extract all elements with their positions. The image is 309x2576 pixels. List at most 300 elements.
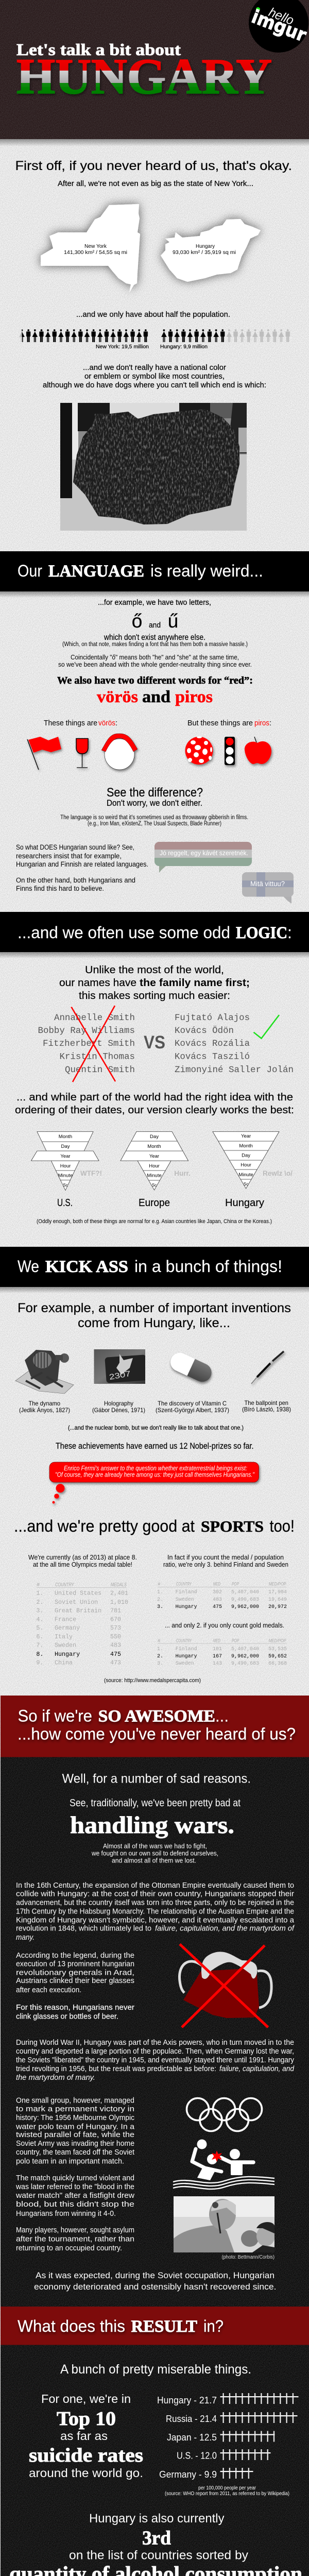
text: wars lost: and almost all of them we lost. bbox=[112, 1857, 196, 1865]
paragraph: 16th century: failure, capitulation, and the martyrdom of bbox=[155, 1924, 295, 1933]
text: see the difference: Don't worry, we don't either. bbox=[107, 798, 202, 808]
table: all time medals: 3. bbox=[36, 1607, 43, 1615]
section bar: language bbox=[0, 551, 309, 598]
name list: family name first: Kovács Rozália bbox=[175, 1039, 250, 1049]
table: medal per population: 1. bbox=[157, 1590, 163, 1596]
invention: ballpoint pen bbox=[242, 1351, 291, 1413]
icon: red-haired head bbox=[101, 734, 138, 770]
text: what Hungarian sounds like bbox=[16, 843, 148, 892]
text: suicide rates top 10: suicide rates bbox=[29, 2445, 143, 2466]
table: medal per population: 2. bbox=[157, 1597, 163, 1603]
text: suicide rates top 10: as far as bbox=[60, 2429, 108, 2443]
table: medal per population: 475 bbox=[213, 1604, 222, 1610]
invention: dynamo: The dynamo bbox=[29, 1400, 60, 1407]
paragraph: beer legend: For this reason, Hungarians never bbox=[16, 2003, 134, 2012]
paragraph: beer legend: Austrians clinked their beer glasses bbox=[16, 1976, 134, 1985]
table: gold medals per population: 66,368 bbox=[268, 1661, 287, 1667]
invention: dynamo bbox=[15, 1350, 74, 1414]
table: gold medals per population: # bbox=[158, 1638, 161, 1643]
table: all time medals: 550 bbox=[110, 1633, 121, 1640]
name list: family name first: Zimonyiné Saller Jolán bbox=[175, 1065, 294, 1075]
name list: first name first bbox=[38, 1006, 135, 1082]
name list: family name first bbox=[175, 1013, 294, 1075]
table: medal per population: Finland bbox=[176, 1589, 197, 1596]
chart: suicide rates crosses: Russia - 21.4 bbox=[166, 2414, 217, 2424]
label: vörös things: : bbox=[115, 719, 117, 727]
heading: alcohol consumption: on the list of countries sorted by bbox=[69, 2548, 248, 2563]
table: gold medals per population bbox=[157, 1638, 287, 1667]
text: two letters: ...for example, we have two letters, bbox=[98, 598, 211, 607]
speech bubble: Hungarian bbox=[154, 842, 252, 873]
section band: so awesome: SO AWESOME bbox=[98, 1707, 215, 1725]
section band: result: RESULT bbox=[131, 2317, 197, 2336]
heading: vörös and piros: and bbox=[142, 688, 170, 706]
note: Asian countries: (Oddly enough, both of these things are normal for e.g. Asian countries like Japan, China or the Koreas.) bbox=[37, 1218, 272, 1225]
diagram: Europe date order: Europe bbox=[139, 1197, 170, 1209]
section band: result bbox=[1, 2307, 309, 2345]
table: gold medals per population: 5,407,040 bbox=[231, 1647, 259, 1652]
map: New York: 141,300 km² / 54,55 sq mi bbox=[64, 249, 127, 256]
table: gold medals per population: 9,490,683 bbox=[231, 1661, 259, 1667]
text: economy: economy deteriorated and ostensibly hasn't recovered since. bbox=[34, 2282, 276, 2292]
table: medal per population bbox=[157, 1582, 287, 1610]
paragraph: water polo team: One small group, however, managed bbox=[16, 2096, 134, 2105]
text: suicide rates top 10: around the world go. bbox=[29, 2466, 143, 2480]
text: family name first: Unlike the most of the world, bbox=[85, 964, 224, 976]
photo: puli dog bbox=[60, 403, 247, 531]
text: see the difference: (e.g., Iron Man, eXistenZ, The Usual Suspects, Blade Runner) bbox=[88, 821, 221, 827]
table: all time medals: 475 bbox=[110, 1651, 121, 1658]
text: what Hungarian sounds like: So what DOES Hungarian sound like? See, bbox=[16, 843, 134, 851]
table: gold medals per population: COUNTRY bbox=[176, 1638, 192, 1643]
text: half the population: ...and we only have about half the population. bbox=[76, 310, 230, 319]
text: suicide rates top 10: For one, we're in bbox=[41, 2392, 131, 2405]
text: two letters: which don't exist anywhere else. bbox=[104, 633, 205, 642]
text: gold medals: ... and only 2. if you only count gold medals. bbox=[165, 1621, 284, 1629]
label: piros things: : bbox=[269, 719, 271, 727]
section bar: kick ass: in a bunch of things! bbox=[134, 1257, 282, 1276]
note: nuclear bomb: (...and the nuclear bomb, but we don't really like to talk about that one.) bbox=[68, 1424, 244, 1431]
text: sad reasons: Well, for a number of sad reasons. bbox=[62, 1772, 251, 1786]
speech bubble: Hungarian: Jó reggelt, egy kávét szeretnék. bbox=[160, 849, 248, 857]
paragraph: water polo team: returning to an occupied country. bbox=[16, 2244, 122, 2252]
pictogram: New York population: New York: 19,5 million bbox=[96, 344, 149, 350]
heading: sports: too! bbox=[270, 1517, 295, 1535]
chart: suicide rates crosses: Japan - 12.5 bbox=[167, 2432, 217, 2443]
diagram: Hungary date order: Sc bbox=[244, 1182, 248, 1187]
table: all time medals: 1,010 bbox=[110, 1599, 128, 1606]
icon: green check bbox=[253, 1015, 279, 1039]
text: place 8: We're currently (as of 2013) at place 8. bbox=[28, 1553, 137, 1561]
paragraph: world war II: tried revolting in 1956, but the result was predictable as before: bbox=[16, 2064, 216, 2073]
section bar: logic: ...and we often use some odd bbox=[18, 923, 230, 942]
section bar: language: LANGUAGE bbox=[48, 562, 144, 581]
badge: hello imgur: hello bbox=[267, 5, 296, 28]
table: all time medals: 5. bbox=[36, 1624, 43, 1632]
heading: alcohol consumption: 3rd bbox=[142, 2528, 171, 2549]
source: medals per capita: (source: http://www.medalspercapita.com) bbox=[104, 1677, 201, 1684]
heading: inventions: For example, a number of important inventions bbox=[18, 1301, 291, 1315]
table: medal per population: Hungary bbox=[176, 1604, 197, 1610]
table: gold medals per population: 59,652 bbox=[268, 1654, 287, 1659]
text: what Hungarian sounds like: researchers insist that for example, bbox=[16, 852, 122, 860]
photo: bleeding water polo player bbox=[174, 2196, 275, 2260]
table: medal per population: POP bbox=[232, 1582, 239, 1587]
heading: first off: First off, if you never heard of us, that's okay. bbox=[15, 159, 292, 173]
chart: suicide rates crosses: Germany - 9.9 bbox=[159, 2469, 217, 2480]
icon: traffic light bbox=[225, 737, 235, 765]
table: all time medals: Great Britain bbox=[55, 1607, 101, 1615]
name list: first name first: Annabelle Smith bbox=[54, 1013, 135, 1023]
section band: result: in? bbox=[203, 2317, 224, 2335]
heading: vörös and piros: piros bbox=[175, 688, 213, 706]
text: national color: although we do have dogs where you can't tell which end is which: bbox=[43, 381, 266, 389]
text: two letters: and bbox=[149, 621, 161, 630]
text: see the difference: The language is so weird that it's sometimes used as throwaway gibberish in films. bbox=[60, 815, 248, 821]
map: Hungary: 93,030 km² / 35,919 sq mi bbox=[173, 249, 236, 256]
speech bubble: Finnish: Mitä vittuu? bbox=[250, 880, 285, 888]
text: place 8 bbox=[28, 1553, 137, 1568]
table: medal per population: # bbox=[158, 1582, 161, 1587]
paragraph: water polo team: water match" after a fistfight drew bbox=[15, 2191, 134, 2200]
paragraph: water polo team: twisted parallel of fate, while the bbox=[16, 2130, 134, 2139]
name list: first name first: Fitzherbert Smith bbox=[43, 1039, 135, 1049]
paragraph: beer legend: According to the legend, during the bbox=[16, 1951, 134, 1960]
table: all time medals: Germany bbox=[55, 1624, 80, 1632]
heading: miserable things: A bunch of pretty miserable things. bbox=[60, 2362, 251, 2377]
paragraph: world war II: country and deported a large portion of the populace. Then, when Germany lost the war, bbox=[16, 2047, 294, 2056]
table: gold medals per population: 53,535 bbox=[268, 1647, 287, 1652]
heading: sports: ...and we're pretty good at bbox=[14, 1517, 195, 1535]
text: national color bbox=[43, 363, 266, 389]
table: medal per population: 302 bbox=[213, 1590, 222, 1596]
invention: holography: Holography bbox=[104, 1400, 133, 1407]
diagram: Europe date order: Minute bbox=[147, 1173, 162, 1179]
section bar: logic: LOGIC bbox=[236, 924, 287, 942]
heading: vörös and piros: vörös bbox=[97, 688, 138, 706]
paragraph: world war II bbox=[16, 2038, 295, 2082]
title intro: Let's talk a bit about bbox=[16, 40, 181, 59]
paragraph: water polo team: after the tournament, rather than bbox=[16, 2235, 134, 2244]
table: all time medals: COUNTRY bbox=[55, 1582, 74, 1588]
header panel bbox=[0, 0, 309, 146]
text: what Hungarian sounds like: Finns find this hard to believe. bbox=[16, 885, 104, 892]
text: see the difference bbox=[60, 786, 248, 827]
text: medal population ratio bbox=[163, 1553, 288, 1568]
paragraph: 16th century: In the 16th Century, the expansion of the Ottoman Empire eventually caused them to bbox=[16, 1881, 294, 1890]
table: gold medals per population: 2. bbox=[157, 1654, 163, 1659]
text: see the difference: See the difference? bbox=[107, 786, 203, 800]
text: family name first: our names have bbox=[59, 977, 136, 989]
section band: result: What does this bbox=[18, 2317, 125, 2335]
paragraph: world war II: the martyrdom of many. bbox=[16, 2073, 95, 2082]
text: medal population ratio: ratio, we're only 3. behind Finland and Sweden bbox=[163, 1561, 288, 1568]
heading: two words for red: We also have two different words for “red”: bbox=[57, 675, 253, 686]
invention: holography: (Gábor Dénes, 1971) bbox=[92, 1406, 145, 1414]
map: New York: New York bbox=[84, 243, 107, 249]
table: all time medals: Italy bbox=[55, 1633, 73, 1640]
label: vörös things: vörös bbox=[98, 719, 115, 727]
text: two letters bbox=[58, 598, 252, 668]
invention: ballpoint pen: The ballpoint pen bbox=[244, 1399, 288, 1406]
name list: first name first: Kristin Thomas bbox=[60, 1052, 135, 1062]
table: gold medals per population: 3. bbox=[157, 1661, 163, 1667]
table: all time medals: 9. bbox=[36, 1659, 43, 1667]
label: vörös things: These things are bbox=[44, 719, 97, 727]
name list: first name first: Quentin Smith bbox=[65, 1065, 135, 1075]
paragraph: water polo team: to mark a permanent victory in bbox=[16, 2105, 134, 2113]
subheading: state of New York: After all, we're not even as big as the state of New York... bbox=[58, 179, 253, 188]
paragraph: beer legend: clink glasses or bottles of beer. bbox=[16, 2012, 118, 2021]
text: two letters: ő bbox=[132, 611, 142, 632]
table: medal per population: 3. bbox=[157, 1604, 163, 1610]
heading: alcohol consumption bbox=[9, 2512, 305, 2576]
diagram: Hungary date order: Rewlz \o/ bbox=[263, 1170, 293, 1177]
table: all time medals: 6. bbox=[36, 1633, 43, 1640]
chart: suicide rates crosses: U.S. - 12.0 bbox=[177, 2450, 217, 2461]
table: all time medals: United States bbox=[55, 1590, 101, 1597]
text: family name first bbox=[59, 964, 250, 1002]
table: all time medals: 483 bbox=[110, 1642, 121, 1649]
diagram: Europe date order bbox=[121, 1131, 191, 1209]
section band: so awesome: ... bbox=[215, 1706, 229, 1725]
callout: Enrico Fermi thought bubble: Enrico Fermi's answer to the question whether extraterrestrial beings exist: bbox=[64, 1465, 247, 1472]
icon: water polo players bbox=[173, 2139, 274, 2189]
table: gold medals per population: Finland bbox=[176, 1646, 197, 1652]
name list: first name first: Bobby Ray Williams bbox=[38, 1026, 135, 1036]
photo: bleeding water polo player: (photo: Bettmann/Corbis) bbox=[221, 2255, 274, 2260]
text: ordering of dates bbox=[15, 1092, 294, 1116]
table: all time medals: Hungary bbox=[55, 1651, 80, 1658]
icon: olympic rings bbox=[186, 2098, 262, 2131]
table: all time medals: 573 bbox=[110, 1624, 121, 1632]
pictogram: New York population bbox=[19, 329, 149, 350]
heading: sports: SPORTS bbox=[201, 1517, 264, 1535]
icon: red X bbox=[71, 1006, 115, 1082]
table: medal per population: 19,649 bbox=[268, 1597, 287, 1603]
map: New York bbox=[41, 204, 140, 293]
diagram: U.S. date order: Day bbox=[61, 1144, 70, 1149]
table: all time medals: MEDALS bbox=[111, 1582, 127, 1588]
diagram: Hungary date order: Hungary bbox=[225, 1197, 264, 1209]
diagram: Hungary date order: Day bbox=[242, 1153, 250, 1159]
section bar: logic bbox=[0, 912, 309, 958]
diagram: U.S. date order: Hour bbox=[60, 1163, 71, 1169]
diagram: Europe date order: Hurr. bbox=[174, 1170, 191, 1177]
table: all time medals: 8. bbox=[36, 1651, 43, 1658]
text: ordering of dates: ... and while part of the world had the right idea with the bbox=[16, 1092, 293, 1103]
table: all time medals: # bbox=[37, 1582, 40, 1588]
paragraph: 16th century bbox=[16, 1881, 295, 1942]
diagram: U.S. date order: Year bbox=[60, 1154, 71, 1159]
paragraph: water polo team: was later referred to the "blood in the bbox=[15, 2182, 134, 2191]
section band: so awesome: ...how come you've never heard of us? bbox=[18, 1725, 296, 1743]
text: national color: or emblem or symbol like most countries, bbox=[84, 372, 225, 381]
invention: vitamin C pill bbox=[156, 1350, 229, 1414]
text: economy bbox=[34, 2270, 276, 2292]
paragraph: beer legend: after each execution. bbox=[16, 1986, 81, 1994]
section bar: language: is really weird... bbox=[150, 562, 263, 580]
paragraph: water polo team: Soviet Army was invading their home bbox=[16, 2139, 134, 2148]
text: two letters: (Which, on that note, makes finding a font that has them both a massive hassle.) bbox=[62, 641, 248, 648]
table: gold medals per population: Sweden bbox=[176, 1660, 194, 1667]
invention: ballpoint pen: (Bíró László, 1938) bbox=[242, 1405, 291, 1413]
pictogram: Hungary population bbox=[160, 329, 291, 350]
table: medal per population: Sweden bbox=[176, 1597, 194, 1603]
table: all time medals: Soviet Union bbox=[55, 1599, 98, 1606]
table: all time medals: France bbox=[55, 1616, 76, 1623]
table: gold medals per population: 9,962,000 bbox=[231, 1654, 259, 1659]
text: family name first: this makes sorting much easier: bbox=[79, 990, 230, 1002]
table: gold medals per population: Hungary bbox=[176, 1654, 197, 1659]
table: medal per population: 483 bbox=[213, 1597, 222, 1603]
table: all time medals: 2. bbox=[36, 1599, 43, 1606]
paragraph: water polo team: history: The 1956 Melbourne Olympic bbox=[16, 2113, 134, 2122]
title: HUNGARY: HUNGARY bbox=[16, 49, 272, 104]
paragraph: beer legend bbox=[16, 1951, 134, 2021]
diagram: Hungary date order bbox=[213, 1131, 293, 1209]
diagram: Europe date order: Day bbox=[150, 1134, 159, 1140]
diagram: Hungary date order: Minute bbox=[238, 1172, 253, 1178]
text: wars lost bbox=[91, 1842, 218, 1865]
name list: family name first: Fujtató Alajos bbox=[175, 1013, 250, 1023]
table: all time medals: 1. bbox=[36, 1590, 43, 1597]
label: piros things: But these things are bbox=[187, 719, 253, 727]
name list: family name first: Kovács Ödön bbox=[175, 1026, 234, 1036]
dark middle section background bbox=[1, 1757, 309, 2576]
section bar: language: Our bbox=[18, 562, 42, 580]
chart: suicide rates crosses bbox=[157, 2393, 299, 2497]
icon: red apple bbox=[245, 737, 271, 764]
text: two letters: so we've been ahead with the whole gender-neutrality thing since ever. bbox=[58, 660, 252, 668]
diagram: U.S. date order bbox=[31, 1131, 102, 1209]
chart: suicide rates crosses: Hungary - 21.7 bbox=[157, 2395, 217, 2405]
text: what Hungarian sounds like: On the other hand, both Hungarians and bbox=[16, 876, 135, 884]
heading: handling wars: handling wars. bbox=[70, 1812, 234, 1839]
paragraph: 16th century: many. bbox=[16, 1933, 35, 1942]
paragraph: water polo team: The match quickly turned violent and bbox=[16, 2174, 134, 2182]
table: medal per population: MED/POP bbox=[269, 1582, 286, 1587]
diagram: Hungary date order: Month bbox=[239, 1143, 253, 1149]
diagram: Europe date order: Year bbox=[149, 1154, 159, 1159]
text: wars lost: we fought on our own soil to defend ourselves, bbox=[91, 1850, 218, 1857]
diagram: Europe date order: Hour bbox=[149, 1163, 160, 1169]
table: all time medals: 4. bbox=[36, 1616, 43, 1623]
table: all time medals: 473 bbox=[110, 1659, 121, 1667]
diagram: U.S. date order: Month bbox=[59, 1134, 72, 1140]
paragraph: world war II: failure, capitulation, and bbox=[219, 2064, 295, 2073]
paragraph: water polo team: Hungarians from winning it 4-0. bbox=[16, 2209, 116, 2218]
invention: holography: 2307 bbox=[109, 1369, 131, 1382]
table: all time medals bbox=[36, 1582, 128, 1667]
invention: vitamin C pill: The discovery of Vitamin C bbox=[158, 1400, 227, 1407]
table: all time medals: Sweden bbox=[55, 1642, 76, 1649]
diagram: Hungary date order: Hour bbox=[241, 1162, 251, 1168]
paragraph: water polo team: Many players, however, sought asylum bbox=[16, 2226, 134, 2234]
chart: suicide rates crosses: per 100,000 people per year bbox=[198, 2485, 256, 2491]
table: medal per population: 9,490,683 bbox=[231, 1597, 259, 1603]
dark header background bbox=[0, 0, 309, 139]
section band: so awesome: So if we're bbox=[18, 1706, 92, 1725]
icon: red flag bbox=[27, 737, 61, 770]
callout: Enrico Fermi thought bubble: "Of course, they are already here among us: they just call themselves Hungarians." bbox=[55, 1471, 254, 1479]
paragraph: 16th century: revolution in 1848, which ultimately led to bbox=[16, 1924, 151, 1933]
text: two letters: ű bbox=[168, 611, 178, 632]
text: two letters: Coincidentally "ő" means both "he" and "she" at the same time, bbox=[71, 653, 239, 661]
diagram: Europe date order: Sc bbox=[152, 1183, 157, 1188]
heading: sports bbox=[14, 1517, 295, 1535]
text: Nobel prizes: These achievements have earned us 12 Nobel-prizes so far. bbox=[56, 1441, 253, 1451]
text: national color: ...and we don't really have a national color bbox=[83, 363, 226, 372]
name list: family name first: Kovács Tasziló bbox=[175, 1052, 250, 1062]
table: all time medals: 781 bbox=[110, 1607, 121, 1615]
paragraph: water polo team: country, the team faced off the Soviet bbox=[16, 2148, 135, 2157]
icon: wine glass bbox=[76, 739, 88, 768]
paragraph: 16th century: Kingdom of Hungary wasn't symbiotic, however, and it eventually escalated into a bbox=[16, 1916, 295, 1925]
section bar: kick ass bbox=[0, 1247, 309, 1293]
callout: Enrico Fermi thought bubble bbox=[49, 1462, 259, 1503]
table: gold medals per population: 143 bbox=[213, 1661, 222, 1667]
text: medal population ratio: In fact if you count the medal / population bbox=[167, 1553, 284, 1561]
text: economy: As it was expected, during the Soviet occupation, Hungarian bbox=[36, 2270, 274, 2280]
invention: holography bbox=[92, 1349, 148, 1414]
table: medal per population: 17,904 bbox=[268, 1590, 287, 1596]
text: place 8: at the all time Olympics medal table! bbox=[33, 1561, 132, 1568]
heading: inventions bbox=[18, 1301, 291, 1330]
pictogram: Hungary population: Hungary: 9,9 million bbox=[160, 344, 208, 350]
table: gold medals per population: 101 bbox=[213, 1647, 222, 1652]
paragraph: 16th century: advancement, but the country itself was torn into three parts, only to be rejoined in the bbox=[16, 1898, 294, 1907]
diagram: Europe date order: Month bbox=[147, 1144, 161, 1149]
label: VS: VS bbox=[144, 1032, 165, 1053]
paragraph: water polo team: water polo team of Hungary. In a bbox=[15, 2122, 135, 2131]
section band: so awesome bbox=[1, 1696, 309, 1757]
diagram: Hungary date order: Year bbox=[241, 1133, 251, 1139]
table: gold medals per population: MED/POP bbox=[269, 1638, 286, 1643]
table: all time medals: 7. bbox=[36, 1642, 43, 1649]
table: gold medals per population: MED bbox=[213, 1638, 220, 1643]
heading: inventions: come from Hungary, like... bbox=[78, 1316, 230, 1330]
section bar: kick ass: KICK ASS bbox=[45, 1258, 128, 1276]
table: medal per population: 20,972 bbox=[268, 1604, 287, 1610]
paragraph: 16th century: collide with Hungary: at the cost of their own country, Hungarians stopped their bbox=[16, 1890, 294, 1899]
paragraph: water polo team: blood, but this didn't stop the bbox=[16, 2200, 134, 2209]
heading: vörös and piros bbox=[97, 688, 213, 706]
icon: polka dot ball bbox=[185, 736, 213, 765]
table: all time medals: 670 bbox=[110, 1616, 121, 1623]
diagram: U.S. date order: Minute bbox=[58, 1173, 73, 1179]
diagram: U.S. date order: Sc bbox=[63, 1183, 68, 1188]
text: ordering of dates: ordering of their dates, our version clearly works the best: bbox=[15, 1105, 294, 1116]
table: all time medals: China bbox=[55, 1659, 73, 1667]
diagram: U.S. date order: WTF?! bbox=[80, 1170, 102, 1177]
table: medal per population: 9,962,000 bbox=[231, 1604, 259, 1610]
text: suicide rates top 10 bbox=[29, 2392, 143, 2480]
section bar: logic: : bbox=[287, 923, 292, 942]
invention: dynamo: (Jedlik Ányos, 1827) bbox=[19, 1406, 70, 1414]
icon: crossed-out beer mug bbox=[179, 1944, 271, 2027]
map: Hungary: Hungary bbox=[196, 243, 215, 249]
text: sad reasons bbox=[62, 1772, 251, 1809]
paragraph: water polo team: polo team in an important match. bbox=[16, 2157, 124, 2165]
text: family name first: the family name first; bbox=[140, 977, 250, 989]
map: Hungary bbox=[161, 219, 261, 282]
paragraph: world war II: During World War II, Hungary was part of the Axis powers, who in turn moved in to the bbox=[16, 2038, 294, 2047]
paragraph: water polo team bbox=[15, 2096, 135, 2252]
label: piros things: piros bbox=[254, 719, 269, 727]
speech bubble: Finnish bbox=[242, 872, 294, 904]
section bar: kick ass: We bbox=[18, 1257, 39, 1276]
